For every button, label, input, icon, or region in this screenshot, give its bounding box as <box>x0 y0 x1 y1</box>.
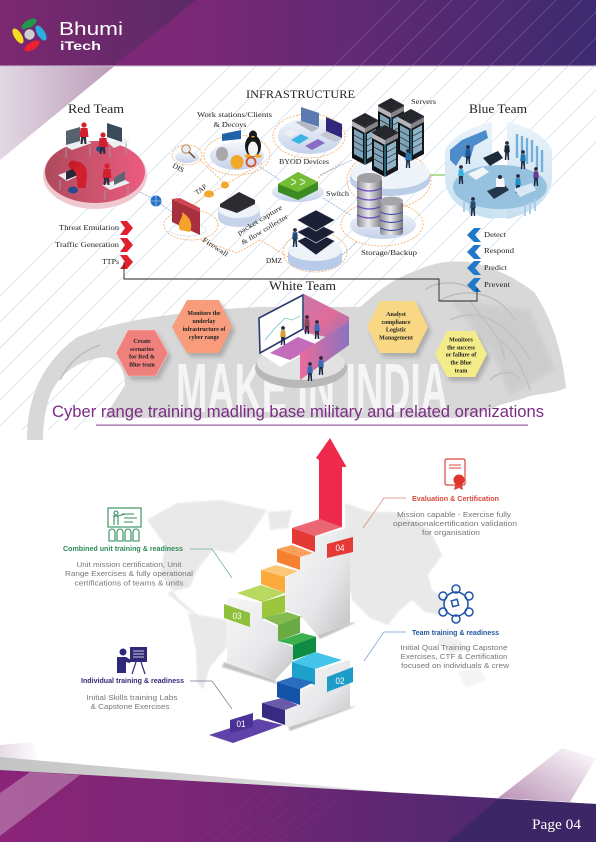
step: orange <box>277 545 313 570</box>
hexagon: monitors underlay: infrastructure of <box>183 327 226 333</box>
switch label: Switch <box>326 190 350 198</box>
hexagon: create scenarios: for Red & <box>129 354 155 360</box>
step: red <box>292 519 342 552</box>
BYOD label: BYOD Devices <box>279 158 329 166</box>
icon: backup drum <box>380 196 403 235</box>
logo wordmark: Bhumi: Bhumi <box>59 19 123 39</box>
icon: DMZ stack <box>297 210 335 255</box>
icon: certificate <box>445 459 465 490</box>
cylinder floor <box>453 165 547 209</box>
badge 02 <box>327 667 353 692</box>
DMZ platform <box>288 239 342 271</box>
servers platform <box>350 157 430 196</box>
laptop screen <box>259 295 303 353</box>
page number: Page 04 <box>532 817 581 833</box>
heading: Combined unit training & readiness <box>63 544 183 553</box>
Red Team capabilities <box>55 221 133 269</box>
analysts <box>458 141 539 216</box>
capture label line 1: packet capture <box>236 204 284 237</box>
description: Range Exercises & fully operational <box>65 569 193 578</box>
hexagon: monitors success: Monitors <box>449 338 473 344</box>
TAP label: TAP <box>193 183 209 197</box>
icon: flame <box>179 212 191 232</box>
step: light orange <box>261 565 298 593</box>
heading: Evaluation & Certification <box>412 494 499 503</box>
White Team connector <box>124 262 477 301</box>
firewall node <box>170 198 230 259</box>
icon: red arrow <box>316 438 346 527</box>
description <box>393 510 517 537</box>
BYOD platform <box>278 118 342 154</box>
Blue Team data centre <box>445 122 552 219</box>
badge 01: 01 <box>236 719 246 729</box>
globe connector icon <box>150 196 162 206</box>
hexagon: monitors success: team <box>455 368 467 374</box>
desks <box>468 151 536 199</box>
heading: White Team: White Team <box>269 278 336 293</box>
leader line <box>363 498 406 528</box>
description: for organisation <box>422 528 480 537</box>
icon: honey pot <box>230 155 244 169</box>
decoys label: & Decoys <box>214 121 247 129</box>
description: Initial Qual Training Capstone <box>400 643 508 652</box>
description <box>400 643 510 670</box>
BYOD node <box>278 107 342 166</box>
background diagonal lines <box>0 66 596 430</box>
icon: presenter <box>117 647 147 674</box>
heading: Team training & readiness <box>412 628 499 637</box>
leader line <box>364 632 406 661</box>
prevent label: Prevent <box>484 280 511 289</box>
hexagon: monitors underlay: Monitors the <box>187 311 221 317</box>
traffic generation label: Traffic Generation <box>55 241 120 249</box>
respond label: Respond <box>484 246 514 255</box>
workstations node <box>197 111 272 170</box>
switch node <box>272 172 350 202</box>
data bars on wall <box>517 134 542 172</box>
logo <box>10 16 123 54</box>
packet capture node <box>218 192 290 247</box>
storage platform <box>350 211 416 239</box>
network connectors <box>164 114 431 272</box>
hexagon: monitors underlay <box>172 300 235 357</box>
servers label: Servers <box>411 98 436 106</box>
step: light blue <box>292 652 342 685</box>
step: mid green <box>263 612 302 641</box>
hexagon: monitors success: the success <box>447 346 476 352</box>
lower holographic panel <box>300 322 349 380</box>
icon: capture appliance <box>220 192 255 213</box>
icon: windows <box>222 130 241 141</box>
DIS node <box>171 145 199 174</box>
hexagon: analyst compliance: Management <box>379 336 413 342</box>
header pale diagonal wedge <box>0 66 114 160</box>
workstations platform <box>210 142 264 170</box>
keyboard keys <box>270 337 318 360</box>
description <box>65 560 193 588</box>
hexagon: create scenarios <box>116 330 171 380</box>
step: blue <box>277 677 314 705</box>
staircase <box>209 438 357 743</box>
blue connectors <box>140 160 357 255</box>
platform disk <box>43 141 147 209</box>
lower wall bars <box>464 199 535 216</box>
description: Initial Skills training Labs <box>86 693 178 702</box>
White Team laptop illustration <box>255 294 349 388</box>
icon: red swirl <box>246 158 256 166</box>
desks and hackers <box>58 122 130 200</box>
storage label: Storage/Backup <box>361 249 418 257</box>
left white block <box>227 597 293 680</box>
description: certifications of teams & units <box>74 578 184 588</box>
badge 04: 04 <box>336 543 344 553</box>
world map background <box>147 500 486 690</box>
storage node <box>350 173 418 257</box>
icon: magnifier <box>182 145 195 158</box>
badge 04 <box>327 537 353 558</box>
Blue Team capabilities <box>467 228 514 292</box>
hexagon: monitors underlay: underlay <box>192 319 216 325</box>
icon: brick wall <box>172 198 200 235</box>
predict label: Predict <box>484 263 508 272</box>
background lion silhouette <box>27 261 566 440</box>
hexagon: create scenarios: scenarios <box>130 347 154 353</box>
server racks <box>352 98 424 177</box>
section title: Cyber range training madling base military and related oranizations <box>52 402 544 421</box>
white area under lion <box>92 418 596 448</box>
description: Exercises, CTF & Certification <box>400 652 508 661</box>
description: Unit mission certification, Unit <box>76 560 182 569</box>
title underline <box>96 424 528 426</box>
hexagon: analyst compliance <box>367 301 431 357</box>
icon: logo petals <box>10 16 49 54</box>
blue chevrons <box>467 228 481 292</box>
red chevrons <box>120 221 133 269</box>
green link to Blue Team <box>430 174 446 176</box>
step: dark green <box>278 633 317 660</box>
purple ramp <box>209 719 283 743</box>
TAP orange nodes <box>204 182 229 198</box>
hexagon: monitors success: or failure of <box>446 352 477 358</box>
description <box>86 693 178 711</box>
heading: Red Team: Red Team <box>68 101 124 116</box>
hexagon: monitors success <box>435 331 490 381</box>
icon: green switch <box>278 172 318 200</box>
description: Mission capable - Exercise fully <box>397 510 511 519</box>
detect label: Detect <box>484 230 507 239</box>
icon: trainer and class <box>108 508 141 541</box>
icon: team round table <box>439 585 473 623</box>
DMZ label: DMZ <box>266 257 282 265</box>
callout: evaluation and certification <box>363 459 517 537</box>
world map on wall <box>450 130 488 166</box>
firewall label: Firewall <box>201 236 230 259</box>
icon: server technician <box>405 149 411 168</box>
icon: storage tower <box>357 173 382 227</box>
capture platform <box>218 200 260 227</box>
team figures <box>280 315 324 381</box>
icon: linux penguin <box>244 130 262 158</box>
icon: devices <box>283 107 342 150</box>
laptop base <box>260 330 325 367</box>
hexagon: monitors success: the Blue <box>450 360 472 366</box>
hexagon: analyst compliance: Logistic <box>386 328 406 334</box>
icon: DMZ person <box>292 228 298 247</box>
leader line <box>190 549 232 578</box>
description: & Capstone Exercises <box>90 702 170 711</box>
step: purple <box>262 698 298 725</box>
heading: Infrastructure: INFRASTRUCTURE <box>246 87 355 101</box>
badge 02: 02 <box>336 676 344 686</box>
lower white block <box>285 660 350 727</box>
callout: individual training <box>81 647 232 711</box>
servers node <box>350 98 436 196</box>
hexagon: create scenarios: Blue team <box>129 362 155 368</box>
heading: Blue Team: Blue Team <box>469 101 527 116</box>
threat emulation label: Threat Emulation <box>59 224 120 232</box>
header band <box>0 0 596 66</box>
upper white block <box>285 527 350 635</box>
hexagon: analyst compliance: compliance <box>382 320 411 326</box>
description: focused on individuals & crew <box>401 661 510 670</box>
DIS label: DIS <box>171 162 186 174</box>
hexagon: monitors underlay: cyber range <box>189 335 220 341</box>
DIS platform <box>175 151 199 163</box>
TTPs label: TTPs <box>102 258 119 266</box>
upper holographic panel <box>304 294 349 342</box>
logo wordmark: iTech: iTech <box>60 39 101 53</box>
leader line <box>190 681 232 709</box>
heading: Individual training & readiness <box>81 676 184 685</box>
icon: apple <box>216 147 228 161</box>
workstations label: Work stations/Clients <box>197 111 272 119</box>
badge 03 <box>224 604 250 627</box>
block shadows <box>222 622 357 731</box>
badge 03: 03 <box>232 611 242 621</box>
DMZ node <box>266 210 342 271</box>
footer band <box>0 742 596 842</box>
description: operationalcertification validation <box>393 519 517 528</box>
callout: team training <box>364 585 510 670</box>
laptop platform <box>255 346 347 388</box>
switch platform <box>272 182 324 202</box>
Red Team platform <box>43 122 147 209</box>
callout: combined unit training <box>63 508 232 588</box>
cylinder walls <box>445 122 552 219</box>
TAP node <box>193 182 229 198</box>
hexagon: analyst compliance: Analyst <box>386 312 406 318</box>
capture label line 2: & flow collector <box>240 212 290 247</box>
hexagon: create scenarios: Create <box>133 339 151 345</box>
screen chart line <box>265 316 300 340</box>
step: lime <box>237 585 285 619</box>
badge 01 <box>230 713 253 733</box>
firewall base <box>170 224 206 236</box>
